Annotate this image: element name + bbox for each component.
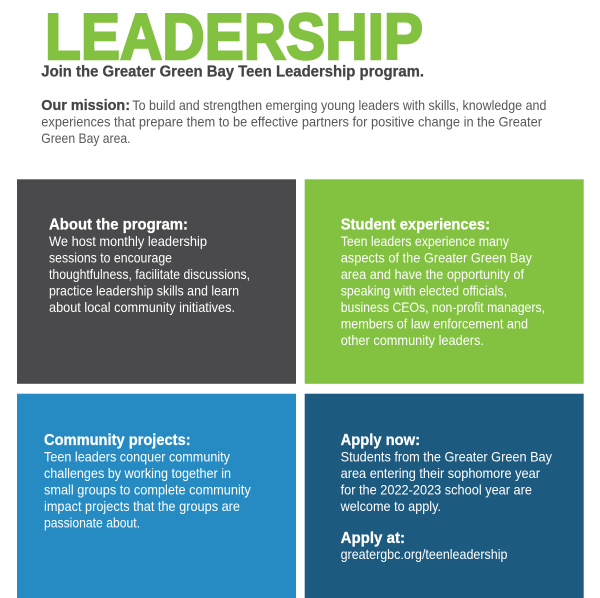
text: eligibility — [340, 450, 552, 514]
mission statement: Green Bay area. — [41, 131, 130, 146]
text: community projects — [44, 450, 251, 531]
text: community projects: passionate about. — [44, 516, 140, 531]
text: community projects: impact projects that the groups are — [44, 499, 240, 514]
heading: apply at: Apply at: — [341, 530, 405, 547]
text: student experiences: aspects of the Greater Green Bay — [341, 250, 532, 266]
text: student experiences — [341, 234, 545, 348]
text: about the program — [49, 234, 250, 315]
text: eligibility: area entering their sophomore year — [341, 466, 540, 481]
panel: community projects — [17, 394, 296, 598]
mission statement: experiences that prepare them to be effective partners for positive change in the Greater — [41, 114, 542, 130]
mission statement: To build and strengthen emerging young leaders with skills, knowledge and — [132, 98, 546, 113]
text: student experiences: members of law enforcement and — [341, 316, 528, 332]
text: about the program: thoughtfulness, facilitate discussions, — [49, 267, 250, 282]
heading: community projects: Community projects: — [44, 432, 191, 449]
text: eligibility: Students from the Greater Green Bay — [341, 450, 552, 465]
text: about the program: practice leadership skills and learn — [49, 284, 239, 298]
heading: student experiences: Student experiences: — [341, 216, 490, 233]
text: about the program: about local community initiatives. — [49, 300, 235, 315]
text: community projects: small groups to complete community — [44, 483, 251, 498]
text: eligibility: for the 2022-2023 school year are — [341, 483, 532, 498]
text: about the program: We host monthly leadership — [49, 234, 207, 249]
text: student experiences: business CEOs, non-profit managers, — [341, 300, 545, 315]
text: student experiences: other community leaders. — [341, 333, 484, 348]
text: student experiences: speaking with elected officials, — [341, 284, 507, 298]
panel: apply now — [305, 394, 584, 598]
text: community projects: challenges by working together in — [44, 466, 231, 481]
title: LEADERSHIP — [45, 0, 423, 73]
mission statement — [41, 97, 546, 146]
subtitle: Join the Greater Green Bay Teen Leadership program. — [41, 64, 424, 80]
text: student experiences: Teen leaders experience many — [341, 234, 509, 249]
mission statement: Our mission: — [41, 97, 130, 114]
heading: about the program: About the program: — [49, 216, 188, 233]
panel: about the program — [17, 179, 296, 384]
text: eligibility: welcome to apply. — [340, 499, 441, 514]
text: about the program: sessions to encourage — [49, 250, 172, 266]
text: community projects: Teen leaders conquer community — [44, 450, 230, 465]
panel: student experiences — [305, 179, 584, 384]
text: student experiences: area and have the opportunity of — [341, 267, 524, 282]
heading: apply now: Apply now: — [341, 432, 420, 449]
link: application url: greatergbc.org/teenleadership — [341, 547, 508, 562]
